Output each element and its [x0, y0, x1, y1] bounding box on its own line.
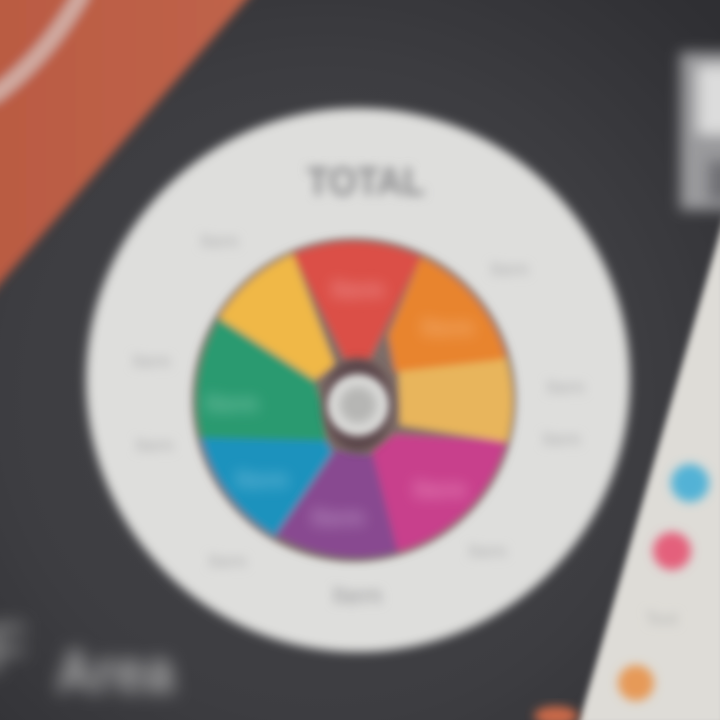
ring labels	[132, 160, 585, 610]
ring labels: Item	[546, 377, 585, 399]
bottom left caption: Area	[56, 638, 175, 705]
segment yellow	[219, 254, 335, 380]
segment magenta	[372, 434, 507, 552]
pie base	[192, 238, 516, 562]
segment red	[293, 242, 421, 362]
segment purple	[276, 450, 398, 557]
decorative orange band	[0, 0, 272, 318]
legend sheet right	[578, 212, 720, 720]
ring labels: Item	[200, 231, 239, 253]
segment green	[196, 318, 327, 443]
ring heading: TOTAL	[307, 160, 425, 204]
ring labels: Item	[135, 435, 174, 457]
segment highlights: Item	[421, 312, 475, 342]
ring labels: Item	[490, 259, 529, 281]
bottom left caption	[0, 609, 175, 705]
legend marker orange	[618, 665, 654, 701]
outer white ring	[86, 108, 630, 652]
central hub	[324, 359, 392, 451]
ring labels: Item	[208, 551, 247, 573]
segment pale yellow	[398, 357, 512, 442]
ring labels: Item	[132, 351, 171, 373]
legend text: Text	[645, 609, 678, 629]
segment highlights: Item	[331, 274, 385, 304]
pie chart	[192, 238, 516, 562]
segment blue	[201, 438, 333, 537]
side card top right	[680, 52, 720, 210]
segment highlights: Item	[413, 474, 467, 504]
ring labels: Item	[468, 541, 507, 563]
segment orange	[388, 257, 506, 372]
segment highlights	[205, 274, 475, 532]
segment highlights: Item	[311, 502, 365, 532]
ring labels: Item	[542, 429, 581, 451]
segment highlights: Item	[235, 464, 289, 494]
legend marker blue	[671, 464, 709, 502]
orange corner	[534, 706, 578, 720]
segment highlights: Item	[205, 388, 259, 418]
legend marker pink	[653, 532, 691, 570]
ring labels: Item	[332, 580, 383, 610]
